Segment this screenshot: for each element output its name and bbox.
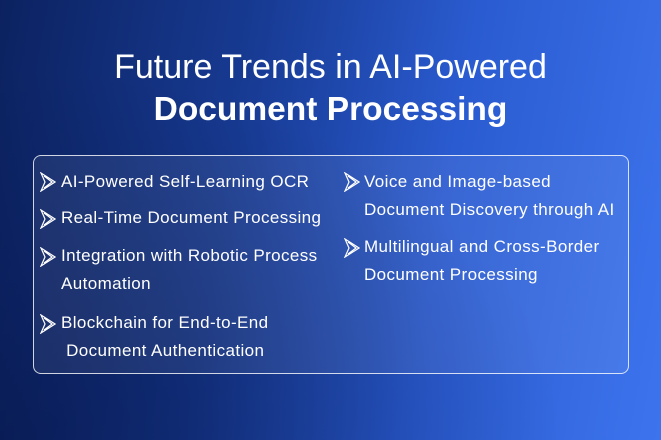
title: Future Trends in AI-Powered: [114, 48, 547, 86]
item 5: Document Discovery through AI: [364, 200, 615, 219]
icon: arrow 4: [40, 314, 56, 334]
item 5: [364, 172, 615, 219]
item 6: [364, 237, 600, 284]
item 4: Blockchain for End-to-End: [61, 313, 268, 332]
item 5: Voice and Image-based: [364, 172, 551, 191]
icon: arrow 2: [40, 209, 56, 229]
icon: arrow 5: [344, 172, 360, 192]
item 3: [61, 246, 318, 293]
item 2: Real-Time Document Processing: [61, 208, 321, 227]
item 4: [61, 313, 268, 360]
icon: arrow 3: [40, 247, 56, 267]
item 3: Integration with Robotic Process: [61, 246, 318, 265]
item 6: Multilingual and Cross-Border: [364, 237, 600, 256]
subtitle: Document Processing: [154, 91, 507, 128]
item 3: Automation: [61, 274, 151, 293]
item 1: AI-Powered Self-Learning OCR: [61, 172, 309, 191]
panel: trends: [33, 155, 629, 374]
item 6: Document Processing: [364, 265, 538, 284]
icon: arrow 6: [344, 238, 360, 258]
icon: arrow 1: [40, 172, 56, 192]
item 4: Document Authentication: [66, 341, 264, 360]
